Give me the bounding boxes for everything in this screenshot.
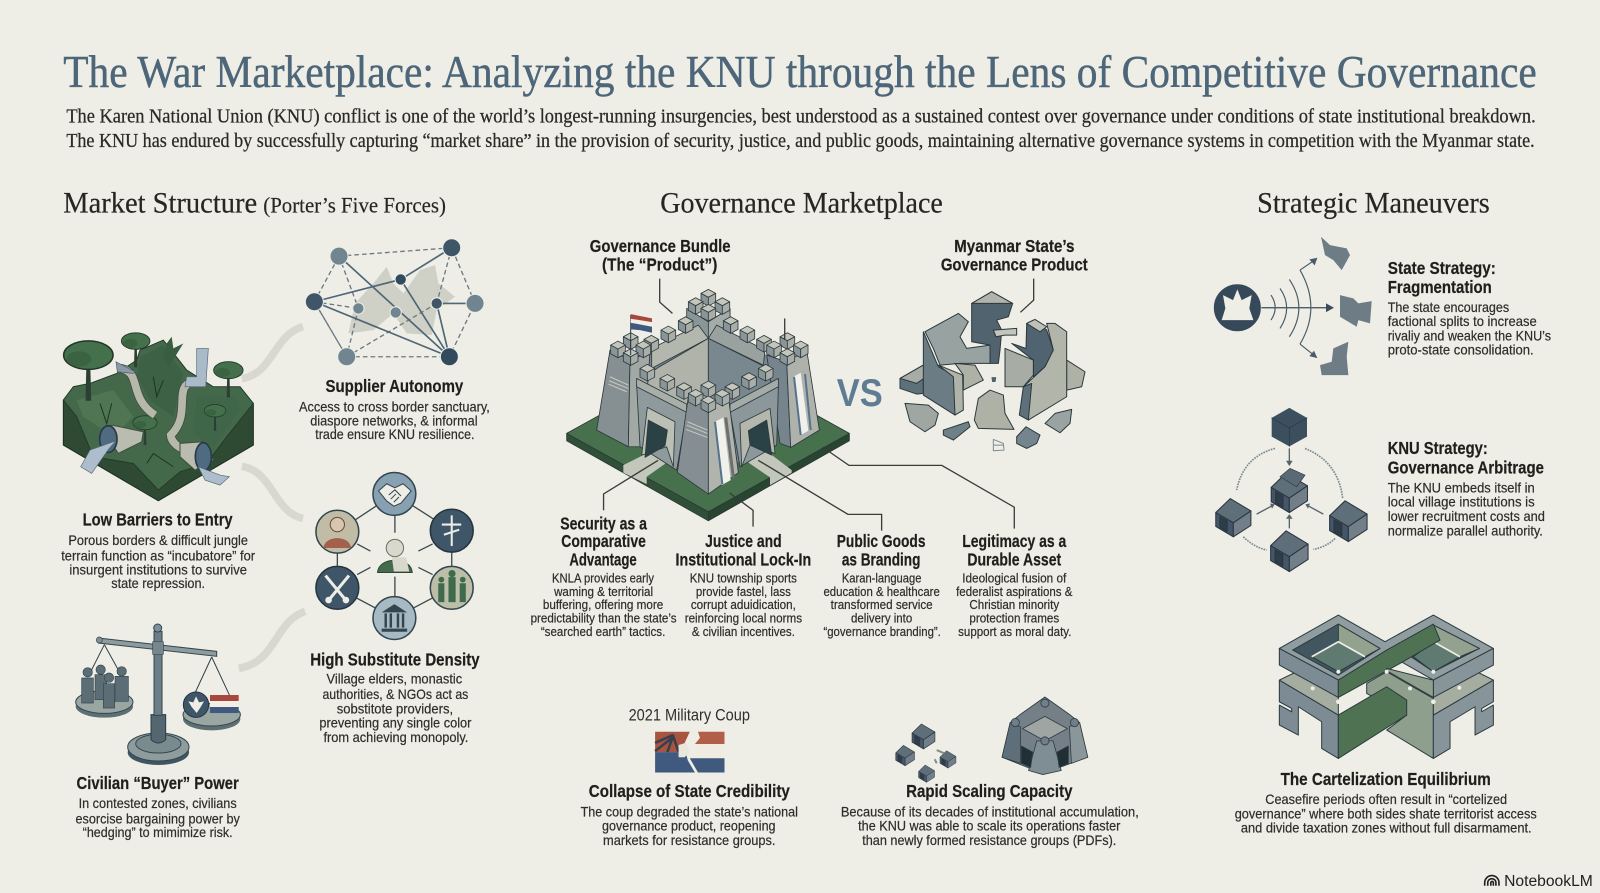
block: cartelization equilibrium: governance” where both sides shate territorist access (1235, 805, 1537, 821)
force: civilian buyer power: “hedging” to mimimize risk. (83, 824, 233, 840)
label: governance bundle: (The “Product”) (602, 254, 717, 274)
force: low barriers to entry: Porous borders & difficult jungle (68, 532, 248, 548)
intro paragraph (66, 106, 1536, 152)
force: low barriers to entry (61, 510, 255, 591)
node: central figure (378, 539, 412, 573)
node: crossed weapons (316, 566, 359, 609)
pillar: security: buffering, offering more (543, 597, 663, 612)
curved connectors (239, 327, 305, 668)
pillar: legitimacy: federalist aspirations & (956, 584, 1073, 599)
block: cartelization equilibrium (1235, 769, 1537, 836)
node: community (430, 566, 473, 609)
grey fortress (1002, 697, 1088, 775)
text: state strategy: The state encourages (1388, 299, 1509, 315)
force: high substitute density (310, 649, 480, 745)
text: state strategy: proto-state consolidation. (1388, 342, 1534, 358)
block: collapse of state credibility: markets for resistance groups. (603, 832, 776, 848)
pillar: public goods: as Branding (842, 549, 920, 569)
pillar: security: Security as a (560, 514, 647, 534)
pillar: legitimacy: Ideological fusion of (962, 571, 1067, 586)
pillar: public goods (823, 531, 941, 639)
label: myanmar state product: Governance Product (941, 254, 1088, 274)
force: low barriers to entry: insurgent institutions to survive (69, 562, 247, 578)
block: rapid scaling capacity: Rapid Scaling Capacity (906, 781, 1073, 801)
icon: intact fortress (567, 289, 849, 521)
pillar: justice: Institutional Lock-In (676, 549, 811, 569)
icon: broken flag (655, 732, 724, 773)
icon: small units scaling to fortress (896, 697, 1088, 782)
text: knu strategy (1388, 438, 1545, 538)
label: myanmar state product (941, 236, 1088, 274)
pillar: legitimacy (956, 531, 1073, 639)
pillar: justice: Justice and (705, 531, 782, 551)
node: elder (316, 510, 359, 553)
label: governance bundle (590, 236, 731, 274)
text: state strategy: State Strategy: (1388, 258, 1496, 278)
icon: jungle terrain with tunnels (63, 333, 253, 501)
force: supplier autonomy: Supplier Autonomy (326, 376, 464, 396)
force: civilian buyer power: Civilian “Buyer” Power (77, 773, 239, 793)
pillar: public goods: transformed service (831, 597, 933, 612)
pillar: security: Comparative (561, 531, 646, 551)
pillar: justice: provide fastel, lass (696, 584, 791, 599)
block: collapse of state credibility (581, 781, 798, 848)
text: state strategy: factional splits to increase (1388, 313, 1537, 329)
icon: crumbling fortress (900, 292, 1085, 451)
force: high substitute density: High Substitute Density (310, 649, 480, 669)
heading: market structure (63, 187, 446, 219)
pillar: justice: corrupt aduidication, (691, 597, 796, 612)
heading: market structure: Market Structure (63, 187, 257, 219)
icon: balance scale (76, 624, 240, 765)
panel: market structure (61, 187, 490, 840)
block: rapid scaling capacity (841, 781, 1139, 848)
text: knu strategy: normalize parallel authority. (1388, 522, 1543, 538)
pillar: legitimacy: protection frames (969, 611, 1060, 626)
pillar: justice: & civilian incentives. (692, 624, 795, 639)
panel: governance marketplace (531, 187, 1139, 848)
force: high substitute density: Village elders, monastic (327, 671, 462, 687)
heading: strategic maneuvers: Strategic Maneuvers (1257, 187, 1490, 219)
block: cartelization equilibrium: Ceasefire periods often result in “cortelized (1265, 791, 1507, 807)
block: cartelization equilibrium: The Cartelization Equilibrium (1281, 769, 1491, 789)
icon: supplier network (305, 239, 484, 366)
force: supplier autonomy: Access to cross border sanctuary, (299, 398, 490, 414)
block: rapid scaling capacity: than newly formed resistance groups (PDFs). (862, 832, 1116, 848)
pillar: legitimacy: Durable Asset (967, 549, 1061, 569)
node: handshake (373, 473, 416, 515)
force: civilian buyer power (76, 773, 240, 840)
force: high substitute density: authorities, & NGOs act as (322, 686, 468, 702)
pillar: legitimacy: Legitimacy as a (962, 531, 1067, 551)
icon: substitute providers hub (316, 473, 473, 639)
icon: governance arbitrage (1216, 407, 1367, 572)
block: collapse of state credibility: governance product, reopening (602, 818, 776, 834)
text: state strategy: Fragmentation (1388, 277, 1492, 297)
text: knu strategy: KNU Strategy: (1388, 438, 1488, 458)
icon: interlocked cartel structure (1279, 615, 1493, 758)
node: cross (430, 509, 473, 552)
text: knu strategy: Governance Arbitrage (1388, 458, 1544, 478)
pillar: security (531, 514, 677, 639)
pillar: security: “searched earth” tactics. (541, 624, 665, 639)
text: state strategy (1388, 258, 1551, 358)
force: high substitute density: preventing any single color (319, 715, 472, 731)
block: cartelization equilibrium: and divide taxation zones without full disarmament. (1241, 820, 1532, 836)
pillar: public goods: “governance branding”. (823, 624, 941, 639)
pillar: legitimacy: Christian minority (969, 597, 1060, 612)
text: knu strategy: local village institutions is (1388, 494, 1535, 510)
pillar: justice: KNU township sports (690, 571, 797, 586)
label: versus: VS (837, 372, 883, 415)
block: collapse of state credibility: The coup degraded the state’s national (581, 803, 798, 819)
pillar: legitimacy: support as moral daty. (958, 624, 1071, 639)
pillar: security: KNLA provides early (552, 571, 654, 586)
pillar: public goods: education & healthcare (823, 584, 940, 599)
node: institution (373, 597, 416, 639)
force: civilian buyer power: In contested zones, civilians (79, 795, 237, 811)
block: rapid scaling capacity: Because of its decades of institutional accumulation, (841, 803, 1139, 819)
block: rapid scaling capacity: the KNU was able to scale its operations faster (858, 818, 1121, 834)
pillar: public goods: Karan-language (842, 571, 921, 586)
text: knu strategy: lower recruitment costs and (1388, 508, 1545, 524)
pillar: security: waming & territorial (553, 584, 653, 599)
pillar: justice: reinforcing local norms (685, 611, 802, 626)
force: supplier autonomy (299, 376, 490, 442)
text: knu strategy: The KNU embeds itself in (1388, 479, 1535, 495)
force: high substitute density: from achieving monopoly. (323, 729, 468, 745)
force: supplier autonomy: diaspore networks, & informal (310, 413, 478, 429)
heading: governance marketplace: Governance Marketplace (660, 187, 943, 219)
pillar: security: predictability than the state’s (531, 611, 677, 626)
text: state strategy: rivaliy and weaken the KNU’s (1388, 327, 1551, 343)
block: collapse of state credibility: Collapse of State Credibility (589, 781, 790, 801)
force: low barriers to entry: state repression. (111, 575, 205, 591)
pillar: justice (676, 531, 811, 639)
panel: strategic maneuvers (1213, 187, 1551, 836)
small scattered houses (896, 724, 956, 782)
force: civilian buyer power: esorcise bargaining power by (76, 811, 240, 827)
label: governance bundle: Governance Bundle (590, 236, 731, 256)
pillar: public goods: Public Goods (837, 531, 926, 551)
label: 2021 military coup: 2021 Military Coup (629, 706, 750, 724)
label: myanmar state product: Myanmar State’s (954, 236, 1074, 256)
connector lines (604, 279, 1034, 531)
pillar: public goods: delivery into (851, 611, 912, 626)
force: low barriers to entry: terrain function as “incubatore” for (61, 547, 255, 563)
force: high substitute density: sobstitote providers, (337, 700, 453, 716)
pillar: security: Advantage (569, 549, 637, 569)
heading: market structure: (Porter’s Five Forces) (263, 192, 446, 217)
force: supplier autonomy: trade ensure KNU resilience. (315, 426, 474, 442)
logo: NotebookLM: NotebookLM (1504, 873, 1593, 890)
force: low barriers to entry: Low Barriers to Entry (83, 510, 233, 530)
icon: state fragmentation (1213, 237, 1372, 375)
